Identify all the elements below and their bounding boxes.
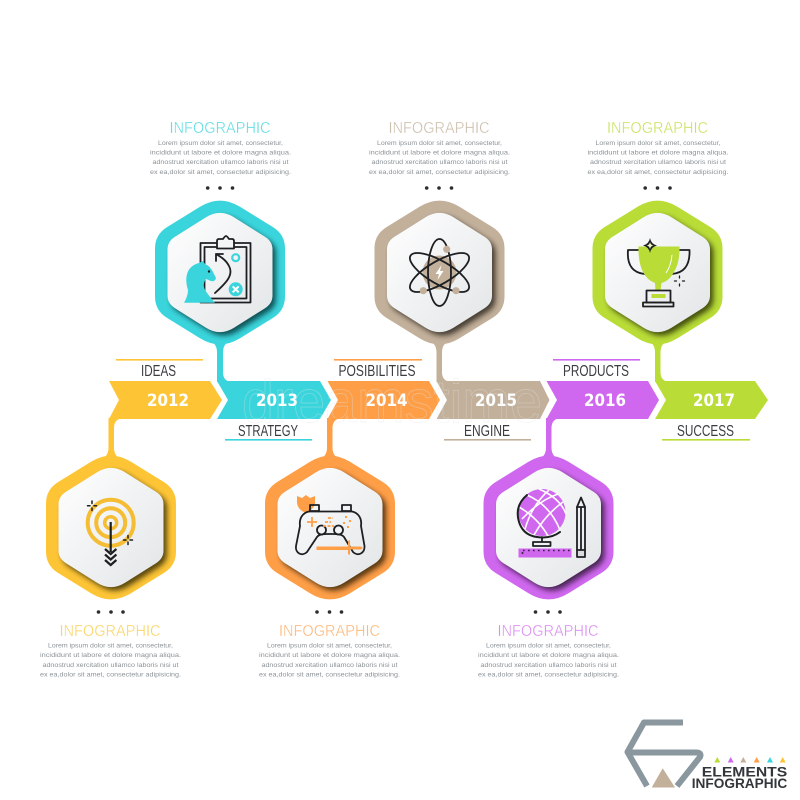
step labels — [116, 359, 750, 441]
text block bottom 3: Lorem ipsum dolor sit amet, consectetur, — [486, 642, 611, 650]
text block bottom 3: INFOGRAPHIC — [498, 623, 598, 640]
arrow 2016 — [546, 381, 659, 419]
text block bottom 1: ex ea,dolor sit amet, consectetur adipisicing. — [40, 672, 181, 678]
text block top 2: INFOGRAPHIC — [388, 120, 490, 137]
text block bottom 2: INFOGRAPHIC — [279, 623, 380, 640]
text block bottom 1: Lorem ipsum dolor sit amet, consectetur, — [48, 642, 173, 650]
text block bottom 3: incididunt ut labore et dolore magna aliqua. — [478, 652, 619, 659]
icon: target and arrow — [88, 500, 134, 565]
hexagon lime success — [592, 201, 722, 344]
text block top 1: ex ea,dolor sit amet, consectetur adipisicing. — [150, 169, 291, 176]
logo: elements infographic — [628, 722, 788, 791]
text block top 3: Lorem ipsum dolor sit amet, consectetur, — [596, 140, 721, 147]
arrow 2014 — [328, 381, 440, 419]
text block top 1: incididunt ut labore et dolore magna aliqua. — [150, 150, 291, 157]
text block top 3: adnostrud xercitation ullamco laboris nisi ut — [590, 159, 726, 166]
label posibilities: POSIBILITIES — [338, 363, 416, 380]
label products: PRODUCTS — [563, 363, 629, 380]
infographic canvas — [40, 122, 787, 788]
text block top 3: ex ea,dolor sit amet, consectetur adipisicing. — [588, 169, 729, 176]
text block top 1: adnostrud xercitation ullamco laboris nisi ut — [152, 159, 289, 166]
label ideas — [116, 359, 203, 380]
text block top 1: INFOGRAPHIC — [170, 120, 270, 137]
text block bottom 2: adnostrud xercitation ullamco laboris nisi ut — [262, 662, 398, 669]
logo: elements infographic: ELEMENTS — [702, 764, 787, 780]
text block bottom 2: incididunt ut labore et dolore magna aliqua. — [259, 652, 400, 659]
label products — [553, 359, 640, 380]
text block bottom 2: Lorem ipsum dolor sit amet, consectetur, — [267, 642, 392, 650]
hexagon orange posibilities — [265, 456, 395, 599]
icon: atom — [405, 239, 474, 306]
text block top 2: ex ea,dolor sit amet, consectetur adipisicing. — [369, 169, 510, 176]
timeline arrows — [109, 381, 768, 419]
text block top 3 — [588, 120, 729, 190]
connectors — [96, 338, 672, 462]
text block bottom 1 — [40, 610, 181, 678]
label engine — [444, 423, 531, 441]
arrow 2017 — [655, 381, 768, 419]
text block top 3: incididunt ut labore et dolore magna aliqua. — [588, 150, 729, 157]
arrow 2016: 2016 — [584, 391, 626, 410]
label ideas: IDEAS — [141, 363, 176, 380]
text block top 1: Lorem ipsum dolor sit amet, consectetur, — [158, 140, 283, 147]
arrow 2017: 2017 — [693, 391, 735, 410]
label engine: ENGINE — [464, 423, 510, 440]
text block bottom 1: INFOGRAPHIC — [60, 623, 160, 640]
text block bottom 2: ex ea,dolor sit amet, consectetur adipisicing. — [259, 672, 400, 678]
text block bottom 2 — [259, 610, 400, 678]
text block top 2: Lorem ipsum dolor sit amet, consectetur, — [377, 140, 502, 147]
text block top 3: INFOGRAPHIC — [607, 120, 708, 137]
text block top 2 — [369, 120, 510, 190]
icon: globe, ruler and pencil — [518, 489, 585, 558]
text block top 2: adnostrud xercitation ullamco laboris nisi ut — [372, 159, 508, 166]
hexagon tan engine — [374, 201, 504, 344]
icon: game controller — [296, 495, 365, 555]
arrow 2015 — [436, 381, 550, 419]
arrow 2013: 2013 — [256, 391, 298, 410]
label posibilities — [334, 359, 422, 380]
arrow 2012: 2012 — [147, 391, 189, 410]
text block bottom 3: adnostrud xercitation ullamco laboris nisi ut — [480, 662, 617, 669]
text block bottom 3: ex ea,dolor sit amet, consectetur adipisicing. — [478, 672, 619, 678]
arrow 2014: 2014 — [366, 391, 408, 410]
label success: SUCCESS — [677, 423, 734, 440]
text block bottom 1: incididunt ut labore et dolore magna aliqua. — [40, 652, 181, 659]
hexagon cyan strategy — [155, 201, 285, 344]
watermark: dreamstime — [242, 368, 542, 435]
arrow 2013 — [217, 381, 331, 419]
logo: elements infographic: INFOGRAPHIC — [692, 776, 788, 791]
icon: trophy — [628, 238, 690, 306]
label strategy: STRATEGY — [238, 423, 298, 440]
text block top 1 — [150, 120, 291, 190]
icon: clipboard and chess knight — [184, 236, 250, 303]
arrow 2012 — [109, 381, 222, 419]
arrow 2015: 2015 — [475, 391, 517, 410]
hexagon purple products — [484, 456, 614, 599]
text block top 2: incididunt ut labore et dolore magna aliqua. — [369, 150, 510, 157]
text block bottom 1: adnostrud xercitation ullamco laboris nisi ut — [42, 662, 179, 669]
hexagon yellow ideas — [46, 456, 176, 599]
text block bottom 3 — [478, 610, 619, 678]
